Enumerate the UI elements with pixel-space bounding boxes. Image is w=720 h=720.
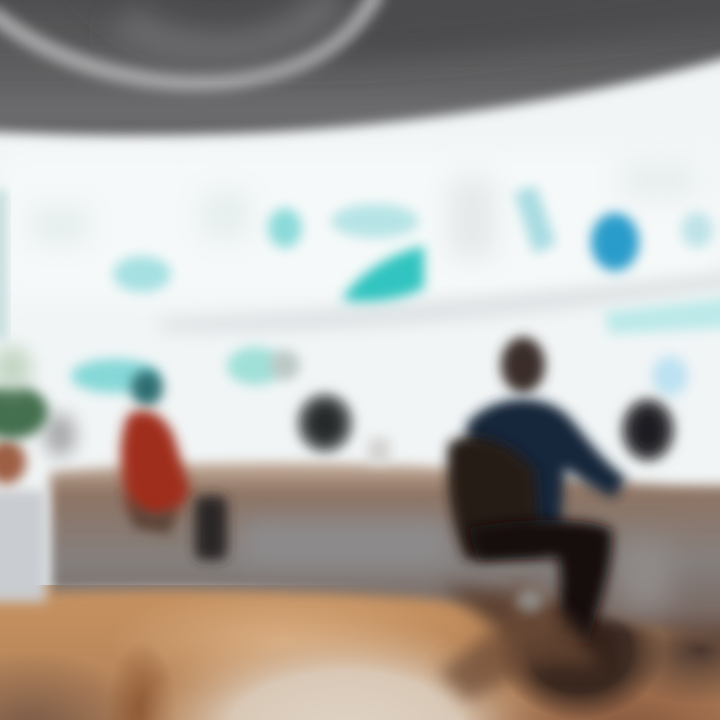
data wall panels [0,150,720,340]
monitor left [297,393,390,464]
plant and pedestal [0,346,76,602]
teal chart blobs [71,186,720,396]
monitor right [621,398,675,462]
desk counter [50,463,720,650]
ceiling ring [0,0,378,82]
chair [447,436,540,560]
floor [0,585,720,720]
person in red [121,370,227,560]
ceiling [0,0,720,136]
person in dark shirt on chair [438,337,626,702]
